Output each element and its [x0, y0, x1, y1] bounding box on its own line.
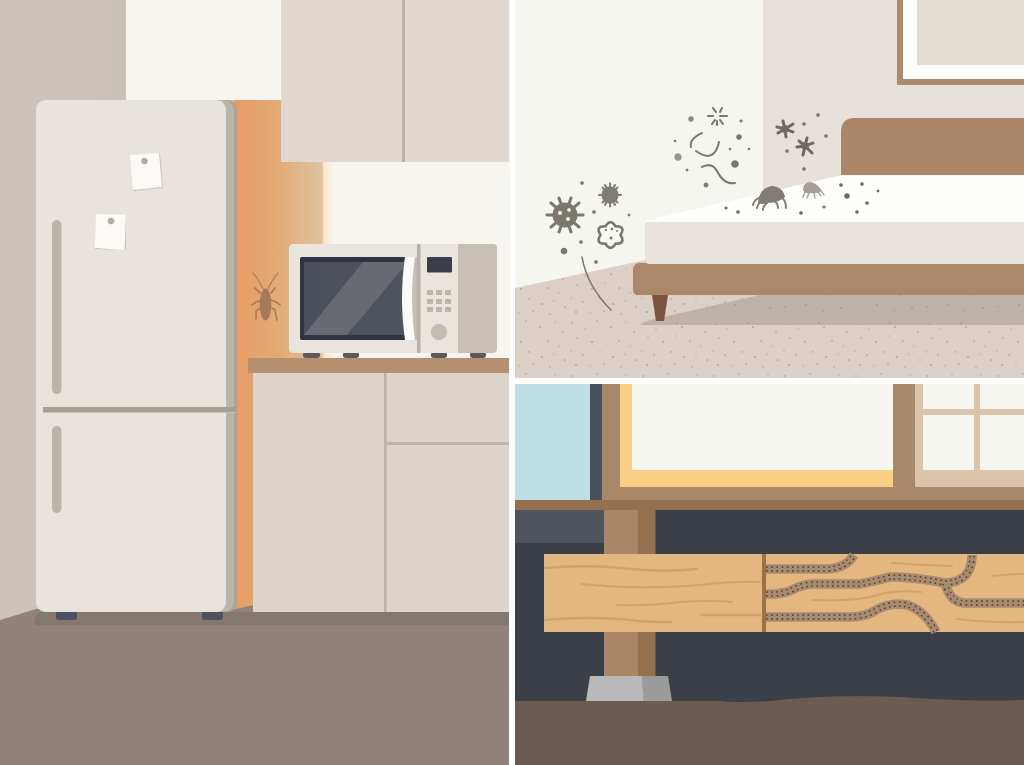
- icon: spiky spore: [599, 184, 621, 206]
- microwave knob: [431, 324, 447, 340]
- panel: bedroom with dust mites and allergens: [515, 0, 1024, 378]
- crawl space dark background: [515, 510, 1024, 710]
- microwave buttons: [427, 290, 451, 312]
- microwave window glass: [304, 262, 408, 335]
- microwave door curve: [404, 257, 417, 340]
- icon: cockroach: [252, 273, 280, 320]
- microwave side panel: [458, 244, 497, 353]
- microwave feet: [303, 352, 486, 358]
- lower door handle: [52, 426, 62, 513]
- soil ground: [515, 696, 1024, 765]
- microwave body: [289, 244, 497, 353]
- tunnel walls: [766, 555, 1024, 632]
- gray upper crawl space band: [515, 510, 605, 543]
- upper door handle: [52, 220, 62, 394]
- speckled carpet: [515, 259, 1024, 378]
- base cabinets: [253, 373, 509, 612]
- icon: mold filament wave: [702, 165, 735, 183]
- icon: star allergen one: [777, 121, 793, 137]
- yellow-framed opening: [620, 384, 893, 487]
- refrigerator side: [215, 100, 237, 612]
- microwave window reflection: [304, 262, 408, 335]
- bed leg: [652, 295, 668, 321]
- icon: mold filament arc: [691, 133, 702, 147]
- mattress side: [645, 222, 1024, 264]
- wood beam with termite tunnels: [544, 554, 1024, 632]
- floating allergen particles: [561, 113, 828, 264]
- refrigerator feet: [56, 612, 223, 620]
- microwave display: [427, 257, 452, 272]
- panel: kitchen with cockroach behind the refrigerator: [0, 0, 510, 765]
- sticky note upper: [130, 153, 163, 191]
- floor shadow under appliances: [34, 612, 509, 625]
- dust mite large: [753, 186, 786, 210]
- dust mite small: [803, 182, 824, 198]
- picture frame: [897, 0, 1024, 85]
- bedroom left wall: [515, 0, 763, 300]
- tunnel termite dots: [766, 555, 1024, 632]
- icon: virus large: [547, 198, 583, 232]
- microwave: [289, 244, 497, 358]
- wood beam body: [544, 554, 1024, 632]
- support post: [604, 510, 656, 677]
- mattress top: [645, 175, 1024, 222]
- bedroom right wall: [763, 0, 1024, 240]
- allergen drift trail: [582, 257, 611, 310]
- window: [915, 384, 1024, 487]
- concrete pier base: [586, 676, 672, 701]
- refrigerator: [36, 100, 237, 620]
- sticky note lower: [95, 214, 126, 250]
- countertop: [248, 358, 509, 373]
- kitchen floor: [0, 605, 509, 765]
- refrigerator door gap: [36, 407, 236, 413]
- icon: spark spore: [708, 108, 727, 125]
- refrigerator body: [36, 100, 226, 612]
- kitchen upper white wall: [126, 0, 510, 100]
- termite tunnels: [766, 555, 1024, 632]
- kitchen backsplash: [323, 100, 510, 370]
- blue exterior: [515, 384, 590, 500]
- icon: star allergen two: [797, 138, 813, 155]
- tunnel center: [766, 555, 1024, 632]
- debris dots on mattress: [724, 182, 879, 215]
- panel: structural wood with termite tunnels: [515, 384, 1024, 765]
- warm orange gap behind the refrigerator: [234, 100, 334, 620]
- kitchen left wall: [0, 0, 240, 625]
- bed frame: [633, 263, 1024, 295]
- icon: pollen outline: [599, 222, 622, 248]
- headboard: [841, 118, 1024, 175]
- floor beam: [515, 500, 1024, 510]
- beam joint: [762, 554, 766, 632]
- bed shadow on the carpet: [639, 295, 1024, 325]
- icon: mold filament curve: [696, 142, 719, 156]
- dark siding strip: [590, 384, 602, 500]
- wood grain: [545, 563, 1024, 622]
- upper cabinets: [281, 0, 509, 162]
- wood wall framing: [602, 384, 1024, 500]
- microwave window: [300, 257, 410, 340]
